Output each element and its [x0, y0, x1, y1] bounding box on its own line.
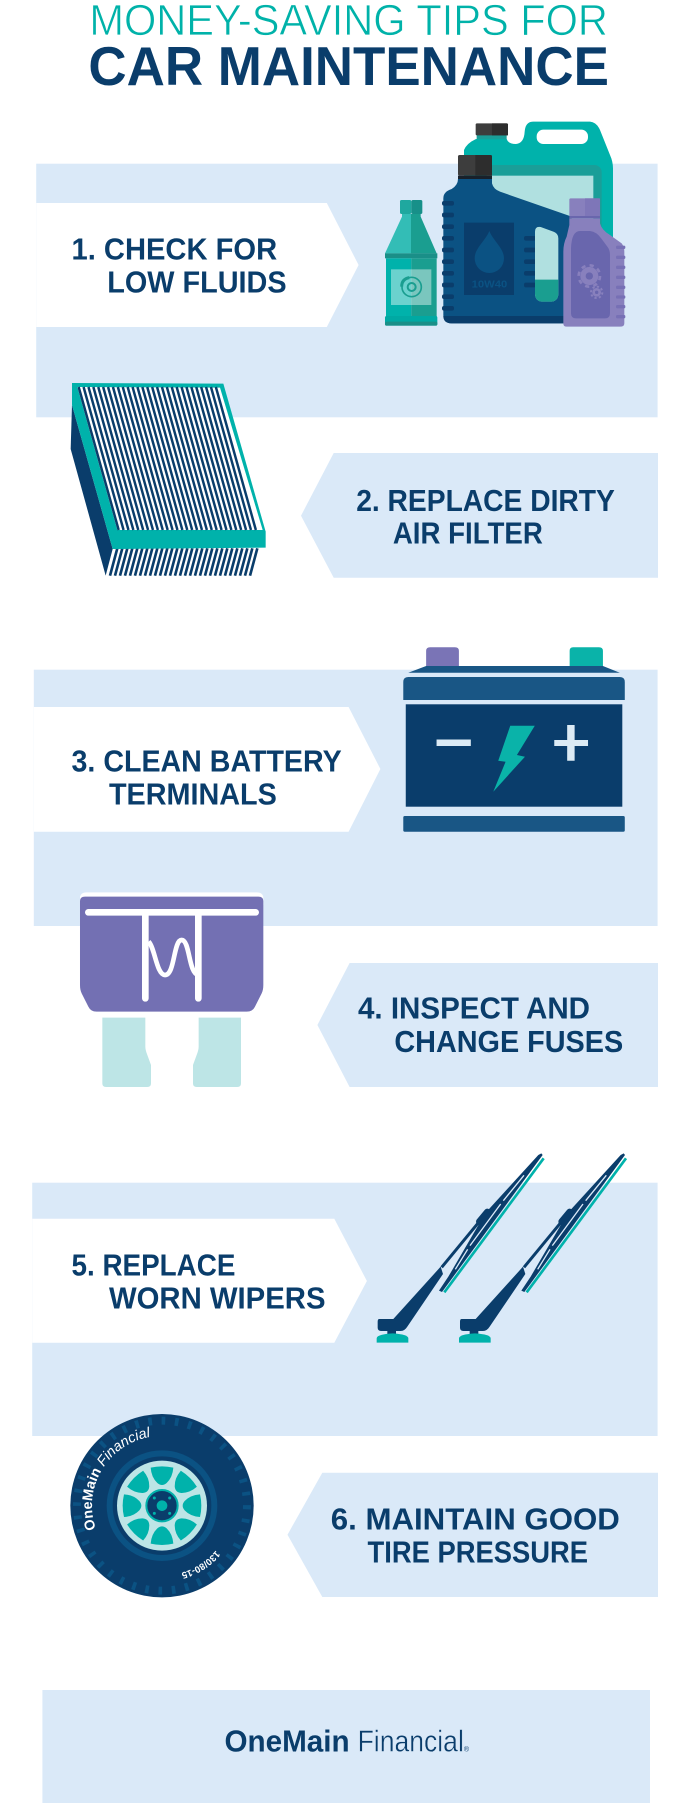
blue oil bottle: 10W40 [472, 279, 508, 290]
icon: air filter [71, 383, 266, 576]
large teal jug [464, 122, 613, 255]
light blue arrow label 4 [317, 963, 658, 1087]
panel: tip 5 wipers [32, 1153, 658, 1436]
tip 5 text: WORN WIPERS [109, 1281, 326, 1316]
logo: OneMain Financial: OneMain [224, 1724, 350, 1759]
tip 4 text: CHANGE FUSES [394, 1024, 623, 1059]
tire brand text: OneMain Financial [82, 1426, 149, 1530]
small teal brake fluid bottle [385, 200, 437, 326]
panel: tip 1 check fluids [36, 122, 658, 417]
tip 5 text [72, 1247, 326, 1316]
icon: wipers [377, 1153, 626, 1343]
icon: tire [70, 1414, 254, 1598]
white arrow label 1 [36, 203, 359, 327]
tip 4 text: 4. INSPECT AND [358, 991, 590, 1026]
panel: tip 3 battery [34, 647, 658, 926]
panel: footer [42, 1690, 650, 1803]
purple bottle [563, 198, 625, 327]
light blue arrow label 6 [288, 1473, 658, 1597]
tip 6 text: 6. MAINTAIN GOOD [331, 1501, 620, 1536]
tip 4 text [358, 991, 623, 1059]
white arrow label 5 [32, 1219, 367, 1343]
panel: tip 6 tire pressure [70, 1414, 658, 1598]
tip 6 text: TIRE PRESSURE [368, 1535, 588, 1570]
wiper right [459, 1153, 626, 1343]
icon: fluid bottles [385, 122, 625, 327]
tip 2 text: 2. REPLACE DIRTY [356, 483, 615, 518]
background band 1 [36, 164, 658, 417]
logo: OneMain Financial [224, 1724, 470, 1759]
tip 3 text: 3. CLEAN BATTERY [72, 744, 342, 779]
tip 1 text [72, 231, 287, 299]
background band 3 [34, 670, 658, 926]
background band 5 [32, 1183, 658, 1436]
light blue arrow label 2 [301, 453, 658, 578]
blue oil bottle [442, 155, 572, 323]
tip 1 text: 1. CHECK FOR [72, 231, 277, 266]
white arrow label 3 [34, 707, 380, 832]
icon: car battery [403, 647, 625, 832]
tip 6 text [331, 1501, 620, 1570]
tip 1 text: LOW FLUIDS [107, 264, 287, 299]
panel: tip 2 air filter [71, 383, 658, 578]
panel: tip 4 fuses [80, 892, 658, 1087]
tip 3 text: TERMINALS [109, 777, 277, 812]
tip 5 text: 5. REPLACE [72, 1247, 235, 1282]
logo: OneMain Financial: Financial [358, 1724, 464, 1759]
wiper left [377, 1153, 544, 1343]
icon: fuse [80, 892, 263, 1087]
logo: OneMain Financial: ® [464, 1746, 470, 1754]
tip 3 text [72, 744, 342, 812]
tip 2 text [356, 483, 615, 551]
title line 2: CAR MAINTENANCE [88, 35, 609, 97]
tire size text: 130/80-15 [182, 1550, 220, 1579]
footer band [42, 1690, 650, 1803]
tip 2 text: AIR FILTER [393, 516, 543, 551]
title [88, 0, 609, 97]
